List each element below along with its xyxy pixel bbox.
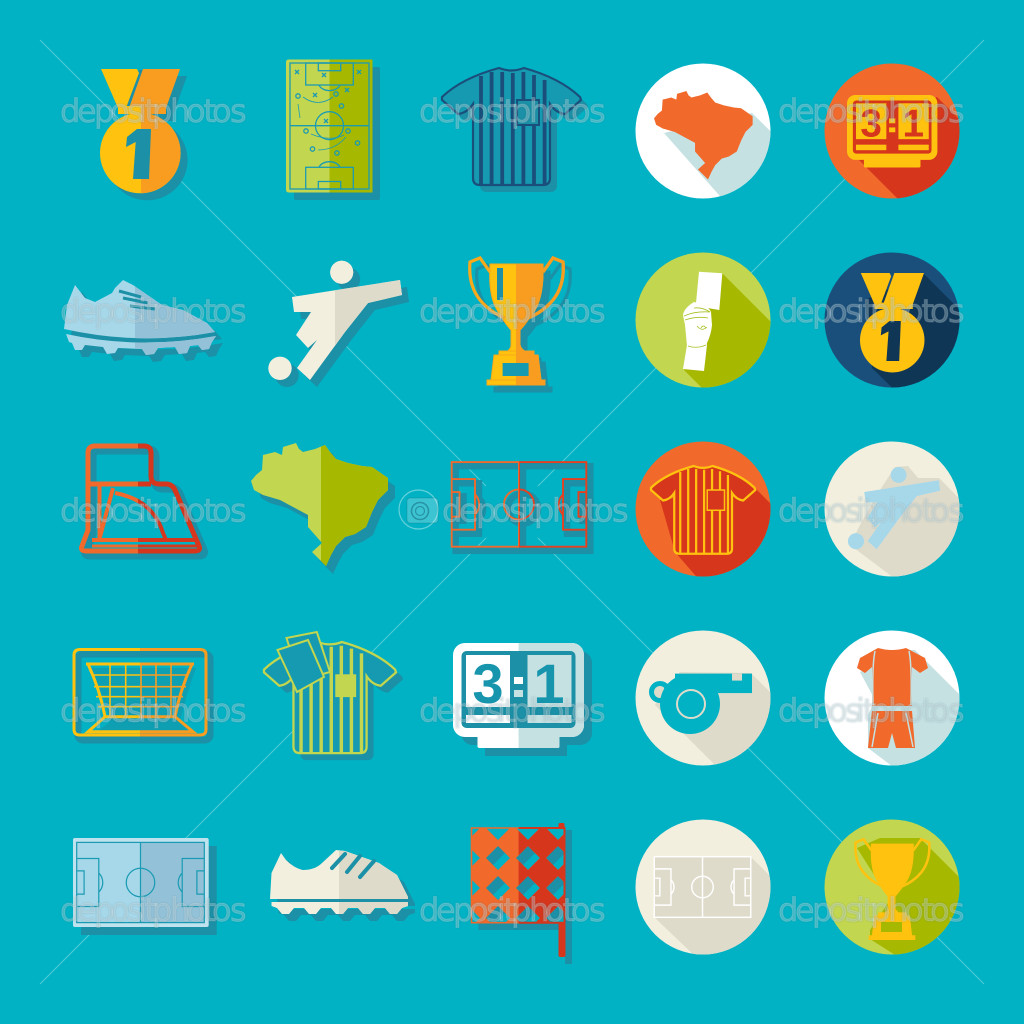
- icon: hand with card in green circle: [636, 252, 770, 388]
- icon: green Brazil map: [251, 443, 395, 574]
- watermark text: [60, 92, 965, 929]
- watermark row 2 right: depositphotos: [778, 292, 965, 330]
- icon: light blue pitch: [73, 838, 217, 935]
- watermark row 1 right: depositphotos: [778, 92, 965, 130]
- watermark row 4 middle: depositphotos: [419, 692, 606, 730]
- icon: player in cream circle: [824, 442, 960, 576]
- icon: gold trophy: [470, 258, 570, 392]
- icon: medal in navy circle: [824, 252, 960, 388]
- camera logo: [399, 490, 438, 529]
- icon: white scoreboard: [453, 643, 592, 756]
- icon: white scoreboard: 3: [472, 652, 504, 715]
- icon: whistle in cream circle: [636, 630, 770, 766]
- icon: football kit in white circle: [824, 630, 960, 766]
- watermark row 4 right: depositphotos: [778, 692, 965, 730]
- watermark row 5 left: depositphotos: [60, 891, 247, 929]
- watermark row 3 middle: depositphotos: [442, 492, 629, 530]
- icon: cream boot: [270, 850, 415, 921]
- watermark row 2 middle: depositphotos: [419, 292, 606, 330]
- icon: blue football boot: [64, 280, 223, 362]
- icon: goal outline: [74, 650, 210, 740]
- icon: kicking player: [268, 261, 409, 387]
- watermark row 5 right: depositphotos: [778, 891, 965, 929]
- icon: referee jersey in orange circle: [636, 442, 770, 576]
- icon: red pitch outline: [452, 462, 590, 551]
- icon: green jersey with cards: [264, 632, 403, 760]
- icon: scoreboard in orange circle: 3: [860, 102, 882, 145]
- icon: trophy in green circle: [824, 820, 960, 954]
- icon: pitch in cream circle: [636, 820, 770, 954]
- watermark row 1 middle: depositphotos: [419, 92, 606, 130]
- icon: navy striped jersey: [442, 68, 588, 192]
- icon: white scoreboard: 1: [533, 652, 565, 715]
- icon: gold medal: [100, 69, 188, 200]
- icon: corner flag: [470, 823, 572, 964]
- icon: scoreboard in orange circle: 1: [902, 102, 924, 145]
- watermark row 1 left: depositphotos: [60, 92, 247, 130]
- watermark row 4 left: depositphotos: [60, 692, 247, 730]
- watermark row 5 middle: depositphotos: [419, 891, 606, 929]
- icon: scoreboard in orange circle: [824, 64, 960, 198]
- watermark row 3 right: depositphotos: [778, 492, 965, 530]
- icon: corner stand outline: [82, 446, 204, 555]
- icon: tactics board: [286, 60, 380, 200]
- watermark row 2 left: depositphotos: [60, 292, 247, 330]
- icon: Brazil map in white circle: [636, 64, 770, 198]
- watermark row 3 left: depositphotos: [60, 492, 247, 530]
